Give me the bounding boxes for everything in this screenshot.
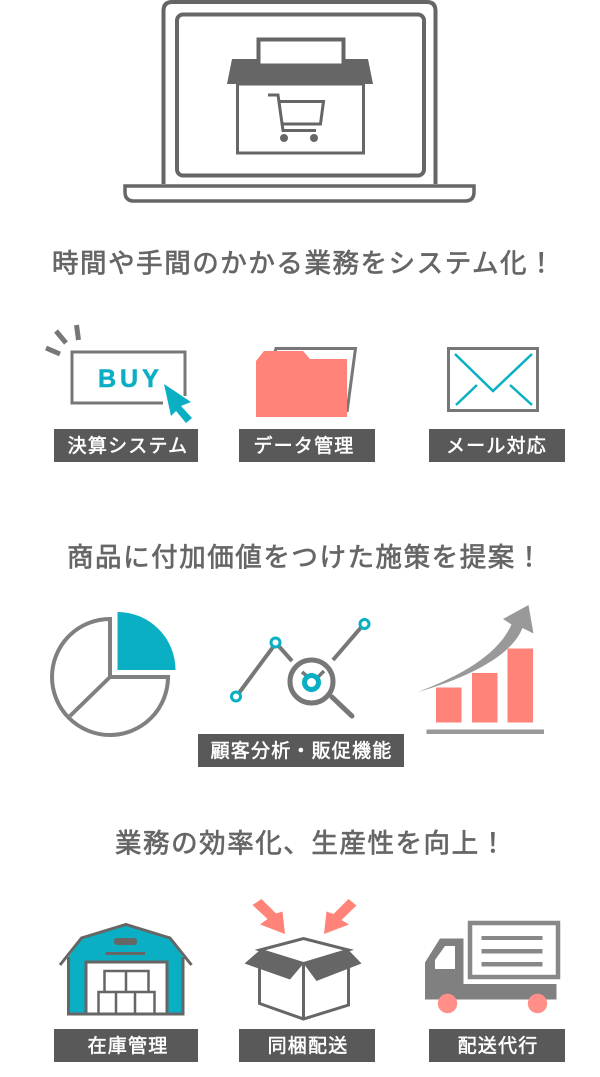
icon: mail [448,348,538,410]
icon: laptop with shop [125,2,474,201]
icon: truck [425,923,558,1013]
icon: analysis magnifier [232,620,369,716]
label: customer analysis: 顧客分析・販促機能 [211,740,392,762]
label: bundled shipping: 同梱配送 [268,1035,348,1057]
icon: warehouse [60,924,192,1014]
label: mail support [429,429,565,462]
label: inventory management [54,1029,198,1062]
icon: arrows into open box [244,899,362,1019]
label: data management: データ管理 [253,435,355,457]
chart: growth bars [418,605,544,734]
icon: buy button [46,325,192,423]
label: shipping agency [429,1029,565,1062]
label: customer analysis [198,734,404,767]
label: shipping agency: 配送代行 [458,1035,538,1057]
label: mail support: メール対応 [446,435,547,457]
icon: folder [256,348,356,417]
label: inventory management: 在庫管理 [88,1035,168,1057]
icon: buy button: BUY [98,365,163,393]
heading: section 3: 業務の効率化、生産性を向上！ [115,828,508,858]
heading: section 2: 商品に付加価値をつけた施策を提案！ [67,542,544,572]
label: data management [239,429,375,462]
label: payment system [54,429,198,462]
label: bundled shipping [239,1029,375,1062]
heading: section 1: 時間や手間のかかる業務をシステム化！ [52,248,556,278]
chart: pie [52,612,176,735]
label: payment system: 決算システム [68,435,188,457]
